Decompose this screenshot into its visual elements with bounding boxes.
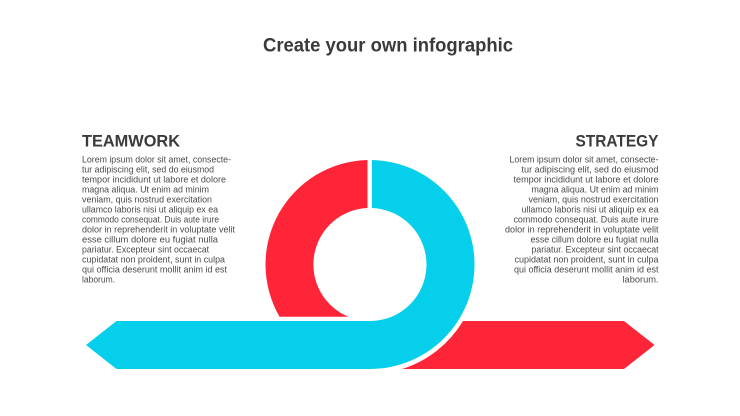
- text block: strategy description: tur adipiscing elit, sed do eiusmod: [522, 164, 658, 174]
- text block: teamwork description: tur adipiscing elit, sed do eiusmod: [82, 164, 214, 174]
- text block: teamwork description: qui officia deserunt mollit anim id est: [82, 264, 227, 274]
- text block: strategy description: qui officia deserunt mollit anim id est: [514, 264, 659, 274]
- text block: teamwork description: pariatur. Excepteur sint occaecat: [82, 244, 209, 254]
- text block: teamwork description: ullamco laboris nisi ut aliquip ex ea: [82, 204, 219, 214]
- text block: strategy description: laborum.: [622, 274, 658, 284]
- text block: teamwork description: [82, 154, 235, 284]
- text block: strategy description: [505, 154, 659, 284]
- red ring segment: [266, 160, 368, 317]
- text block: strategy description: Lorem ipsum dolor sit amet, consecte-: [510, 154, 658, 164]
- text block: teamwork description: Lorem ipsum dolor sit amet, consecte-: [82, 154, 231, 164]
- text block: teamwork description: tempor incididunt ut labore et dolore: [82, 174, 226, 184]
- arrow: red pointing right: [402, 321, 654, 369]
- text block: teamwork description: dolor in reprehenderit in voluptate velit: [82, 224, 235, 234]
- text block: strategy description: esse cillum dolore eu fugiat nulla: [530, 234, 659, 244]
- text block: strategy description: ullamco laboris nisi ut aliquip ex ea: [522, 204, 659, 214]
- text block: teamwork description: cupidatat non proident, sunt in culpa: [82, 254, 226, 264]
- diagram: looped arrows: [86, 160, 654, 369]
- heading: teamwork: TEAMWORK: [82, 133, 180, 151]
- text block: strategy description: pariatur. Excepteur sint occaecat: [532, 244, 659, 254]
- panel: teamwork: [82, 133, 235, 284]
- text block: strategy description: magna aliqua. Ut enim ad minim: [532, 184, 659, 194]
- text block: teamwork description: commodo consequat. Duis aute irure: [82, 214, 219, 224]
- text block: strategy description: veniam, quis nostrud exercitation: [528, 194, 658, 204]
- arrow: cyan loop pointing left: [86, 160, 474, 369]
- panel: strategy: [505, 133, 659, 284]
- text block: teamwork description: veniam, quis nostrud exercitation: [82, 194, 212, 204]
- text block: strategy description: dolor in reprehenderit in voluptate velit: [505, 224, 659, 234]
- text block: teamwork description: magna aliqua. Ut enim ad minim: [82, 184, 209, 194]
- text block: teamwork description: esse cillum dolore eu fugiat nulla: [82, 234, 219, 244]
- text block: teamwork description: laborum.: [82, 274, 115, 284]
- title: Create your own infographic: [263, 36, 513, 56]
- text block: strategy description: commodo consequat. Duis aute irure: [514, 214, 658, 224]
- heading: strategy: STRATEGY: [576, 133, 658, 151]
- text block: strategy description: cupidatat non proident, sunt in culpa: [514, 254, 659, 264]
- text block: strategy description: tempor incididunt ut labore et dolore: [514, 174, 658, 184]
